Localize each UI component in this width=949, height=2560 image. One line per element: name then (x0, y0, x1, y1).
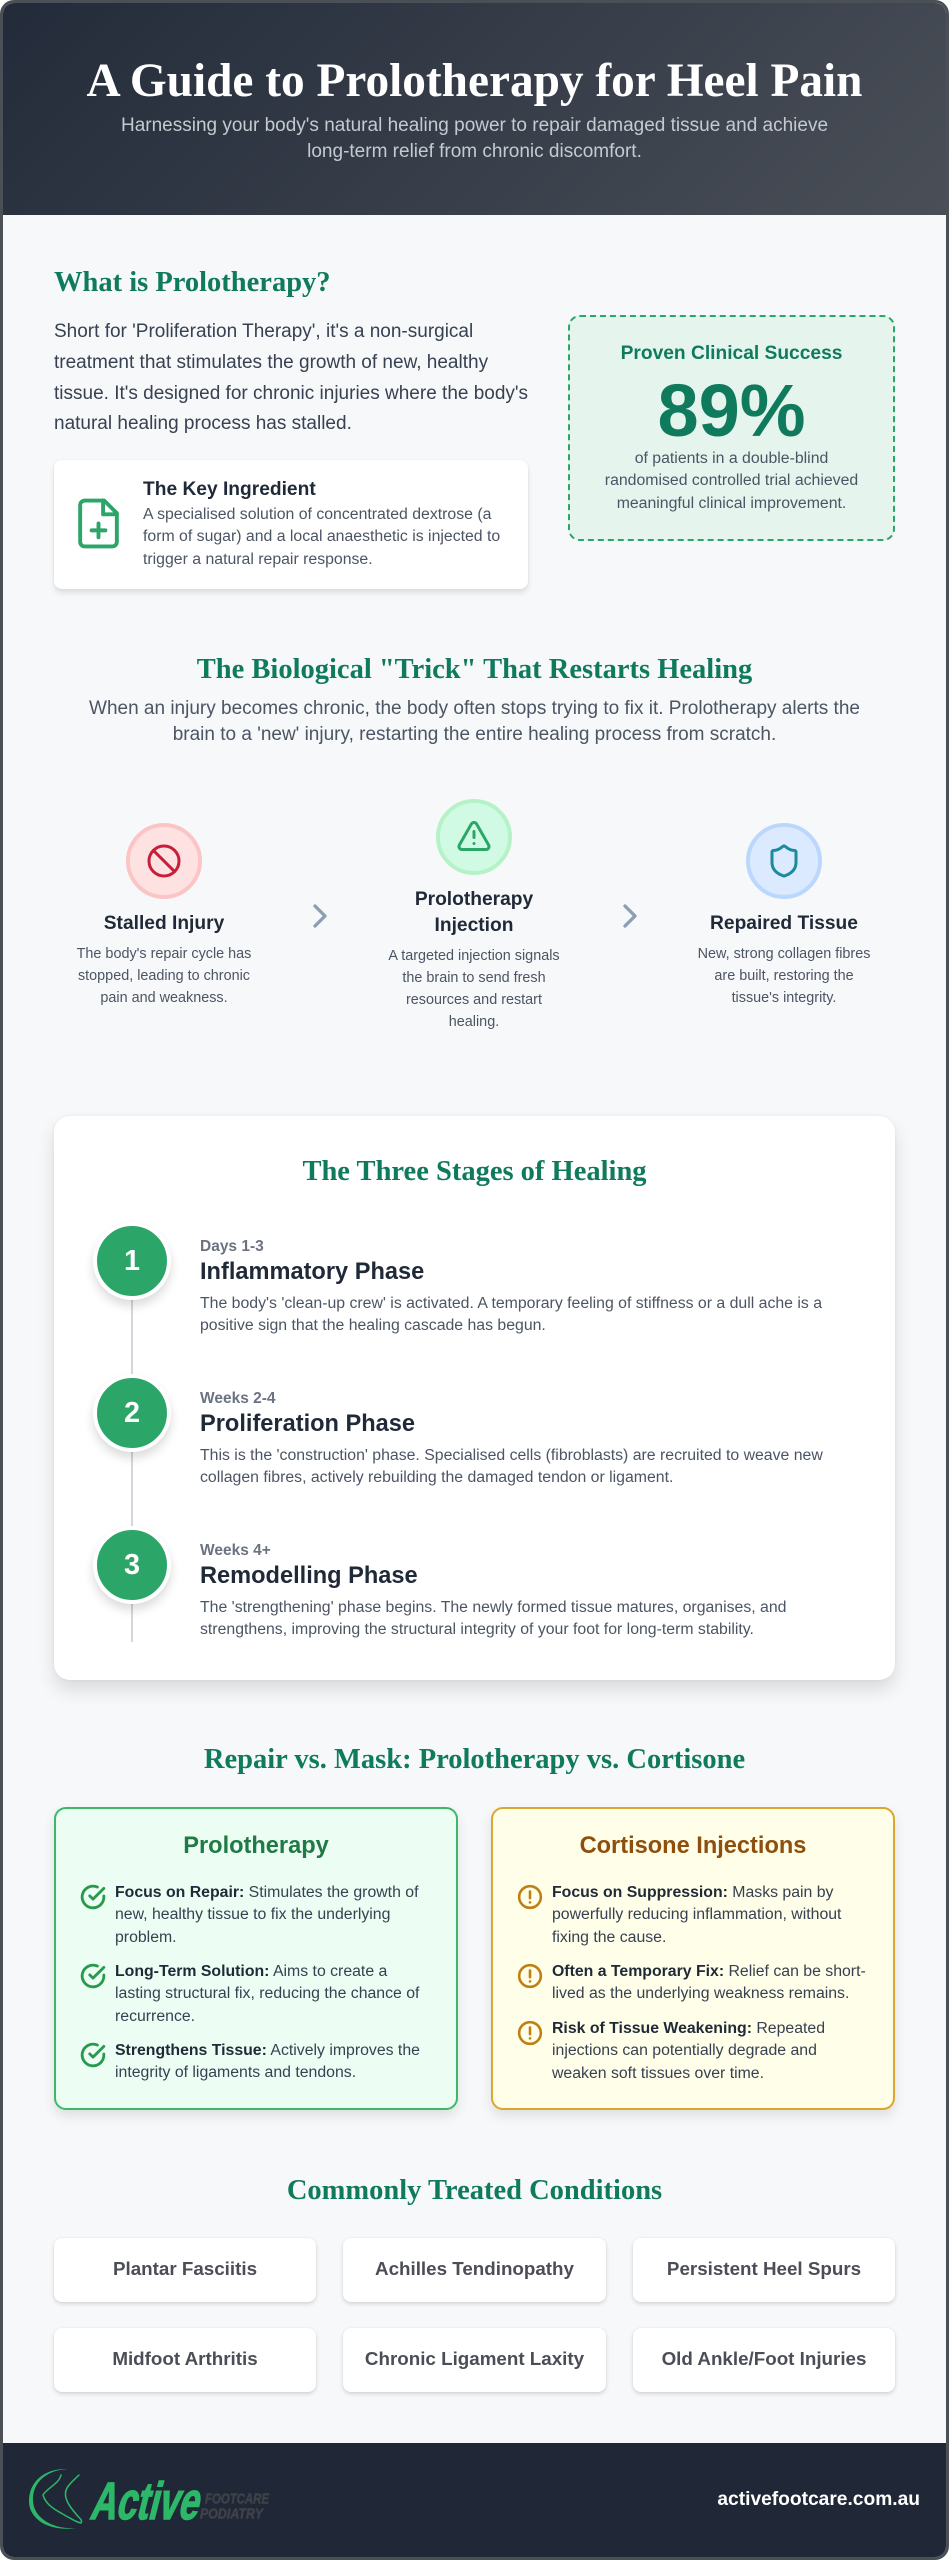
panel heading: Prolotherapy (183, 1833, 329, 1859)
stage number: 1 (124, 1245, 140, 1277)
heading: commonly treated conditions: Commonly Treated Conditions (287, 2175, 662, 2206)
step title: Prolotherapy (415, 889, 533, 910)
stage description: collagen fibres, actively rebuilding the damaged tendon or ligament. (200, 1469, 673, 1486)
step description: the brain to send fresh (402, 970, 546, 986)
website: activefootcare.com.au (717, 2489, 920, 2510)
arrow (623, 904, 637, 928)
stage timing: Weeks 4+ (200, 1542, 271, 1559)
stage number (93, 1374, 171, 1452)
stat number: 89% (657, 369, 806, 452)
item text: Focus on Repair: Stimulates the growth of (115, 1884, 418, 1901)
stage number: 3 (124, 1549, 140, 1581)
panel: cortisone injections (491, 1807, 895, 2110)
intro paragraph: tissue. It's designed for chronic injuries where the body's (54, 383, 528, 404)
step description: A targeted injection signals (388, 948, 560, 964)
item text: problem. (115, 1929, 177, 1946)
footer (3, 2443, 946, 2557)
condition card (54, 2238, 316, 2302)
step: stalled injury (76, 823, 251, 1006)
biological trick intro: brain to a 'new' injury, restarting the entire healing process from scratch. (173, 724, 776, 745)
item text: weaken soft tissues over time. (552, 2065, 764, 2082)
stat caption: randomised controlled trial achieved (605, 472, 858, 489)
stage 1 (90, 1226, 822, 1334)
item text: new, healthy tissue to fix the underlying (115, 1906, 390, 1923)
item text (115, 1963, 420, 2025)
logo subtext: FOOTCARE (205, 2490, 270, 2508)
title: A Guide to Prolotherapy for Heel Pain (87, 55, 862, 107)
panel: clinical success stat (568, 315, 895, 541)
icon: alert (518, 1884, 542, 1910)
item text: lasting structural fix, reducing the chance of (115, 1985, 419, 2002)
heading: three stages: The Three Stages of Healing (302, 1156, 647, 1187)
icon: prohibited (126, 823, 202, 899)
panel: key ingredient (54, 460, 528, 589)
heading: repair vs mask: Repair vs. Mask: Prolotherapy vs. Cortisone (204, 1744, 745, 1775)
condition card: Midfoot Arthritis (112, 2348, 258, 2369)
item text (115, 2042, 420, 2081)
stat heading: Proven Clinical Success (621, 343, 842, 364)
item text (552, 1884, 842, 1946)
biological trick intro (89, 698, 860, 745)
step: prolotherapy injection (388, 799, 560, 1030)
arrow (313, 904, 327, 928)
item text (552, 1963, 866, 2002)
panel: prolotherapy (54, 1807, 458, 2110)
key ingredient text: form of sugar) and a local anaesthetic is injected to (143, 528, 500, 545)
item: temporary fix (518, 1963, 866, 2002)
condition card (343, 2238, 606, 2302)
icon: shield (746, 823, 822, 899)
icon: check (80, 1884, 106, 1910)
step title: Injection (435, 915, 513, 936)
panel: three stages of healing (54, 1116, 895, 1680)
stat caption: meaningful clinical improvement. (617, 495, 846, 512)
item text: Risk of Tissue Weakening: Repeated (552, 2020, 825, 2037)
item text: lived as the underlying weakness remains. (552, 1985, 849, 2002)
stage timing: Weeks 2-4 (200, 1390, 276, 1407)
step description: stopped, leading to chronic (78, 968, 250, 984)
item text: Focus on Suppression: Masks pain by (552, 1884, 833, 1901)
item text: Long-Term Solution: Aims to create a (115, 1963, 387, 1980)
icon: check (80, 2042, 106, 2068)
item text: recurrence. (115, 2008, 195, 2025)
icon: warning triangle (436, 799, 512, 875)
stage title: Proliferation Phase (200, 1411, 415, 1437)
step description: The body's repair cycle has (77, 946, 251, 962)
logo subtext: PODIATRY (200, 2506, 265, 2522)
item: strengthens tissue (80, 2042, 420, 2081)
biological trick intro: When an injury becomes chronic, the body often stops trying to fix it. Prolotherapy alerts the (89, 698, 860, 719)
intro paragraph: treatment that stimulates the growth of new, healthy (54, 352, 488, 373)
key ingredient text (143, 506, 500, 568)
step description (698, 946, 870, 1006)
stage number: 2 (124, 1397, 140, 1429)
condition card: Achilles Tendinopathy (375, 2258, 574, 2279)
stage number (93, 1222, 171, 1300)
icon: alert (518, 1964, 542, 1988)
step title: Repaired Tissue (710, 913, 858, 934)
step description: pain and weakness. (100, 990, 228, 1006)
condition card (633, 2238, 895, 2302)
stage 2 (90, 1374, 823, 1486)
icon: check (80, 1964, 106, 1988)
stage description: The body's 'clean-up crew' is activated. A temporary feeling of stiffness or a dull ache is a (200, 1295, 822, 1312)
item: focus on suppression (518, 1884, 842, 1946)
header banner (3, 3, 946, 215)
step description: New, strong collagen fibres (698, 946, 870, 962)
heading: biological trick: The Biological "Trick" That Restarts Healing (197, 654, 752, 685)
stat caption (605, 450, 858, 512)
stage description: The 'strengthening' phase begins. The newly formed tissue matures, organises, and (200, 1599, 786, 1616)
step title (415, 889, 533, 936)
intro paragraph: natural healing process has stalled. (54, 413, 352, 434)
stage description (200, 1295, 822, 1334)
logo swoosh (29, 2469, 77, 2529)
stage timing: Days 1-3 (200, 1238, 264, 1255)
panel heading: Cortisone Injections (580, 1833, 806, 1859)
item text (552, 2020, 825, 2082)
step description: resources and restart (406, 992, 542, 1008)
item: tissue weakening (518, 2020, 825, 2082)
condition card: Old Ankle/Foot Injuries (662, 2348, 866, 2369)
stage description (200, 1599, 786, 1638)
step description: tissue's integrity. (732, 990, 836, 1006)
key ingredient text: trigger a natural repair response. (143, 551, 373, 568)
item text: injections can potentially degrade and (552, 2042, 817, 2059)
step title: Stalled Injury (104, 913, 224, 934)
subtitle (121, 115, 828, 162)
key ingredient text: A specialised solution of concentrated dextrose (a (143, 506, 491, 523)
stage title: Inflammatory Phase (200, 1259, 424, 1285)
condition card: Persistent Heel Spurs (667, 2258, 861, 2279)
item text: Strengthens Tissue: Actively improves the (115, 2042, 420, 2059)
stat caption: of patients in a double-blind (635, 450, 828, 467)
stage number (93, 1526, 171, 1604)
logo: active footcare podiatry (29, 2469, 270, 2531)
step description (388, 948, 560, 1030)
condition card (343, 2328, 606, 2392)
item text: integrity of ligaments and tendons. (115, 2064, 356, 2081)
condition card: Plantar Fasciitis (113, 2258, 257, 2279)
condition card: Chronic Ligament Laxity (365, 2348, 584, 2369)
logo foot outline (43, 2475, 82, 2523)
step description: healing. (449, 1014, 499, 1030)
stage title: Remodelling Phase (200, 1563, 418, 1589)
item: long-term solution (80, 1963, 420, 2025)
stage 3 (90, 1526, 786, 1638)
heading: what is prolotherapy: What is Prolotherapy? (54, 267, 331, 298)
condition card (54, 2328, 316, 2392)
item text: Often a Temporary Fix: Relief can be short- (552, 1963, 866, 1980)
intro paragraph: Short for 'Proliferation Therapy', it's a non-surgical (54, 321, 473, 342)
condition card (633, 2328, 895, 2392)
subtitle: long-term relief from chronic discomfort. (307, 141, 642, 162)
timeline line (131, 1293, 133, 1642)
logo wordmark: Active (86, 2472, 209, 2531)
stage description: This is the 'construction' phase. Specialised cells (fibroblasts) are recruited to weave new (200, 1447, 823, 1464)
stage description: positive sign that the healing cascade has begun. (200, 1317, 546, 1334)
intro paragraph (54, 321, 528, 434)
subtitle: Harnessing your body's natural healing power to repair damaged tissue and achieve (121, 115, 828, 136)
icon: file plus (78, 498, 119, 548)
item text (115, 1884, 419, 1946)
stage description: strengthens, improving the structural integrity of your foot for long-term stability. (200, 1621, 754, 1638)
item: focus on repair (80, 1884, 419, 1946)
icon: alert (518, 2020, 542, 2046)
step description: are built, restoring the (714, 968, 854, 984)
step description (76, 946, 251, 1006)
item text: fixing the cause. (552, 1929, 666, 1946)
stage description (200, 1447, 823, 1486)
item text: powerfully reducing inflammation, without (552, 1906, 841, 1923)
step: repaired tissue (698, 823, 870, 1006)
key ingredient heading: The Key Ingredient (143, 479, 316, 500)
